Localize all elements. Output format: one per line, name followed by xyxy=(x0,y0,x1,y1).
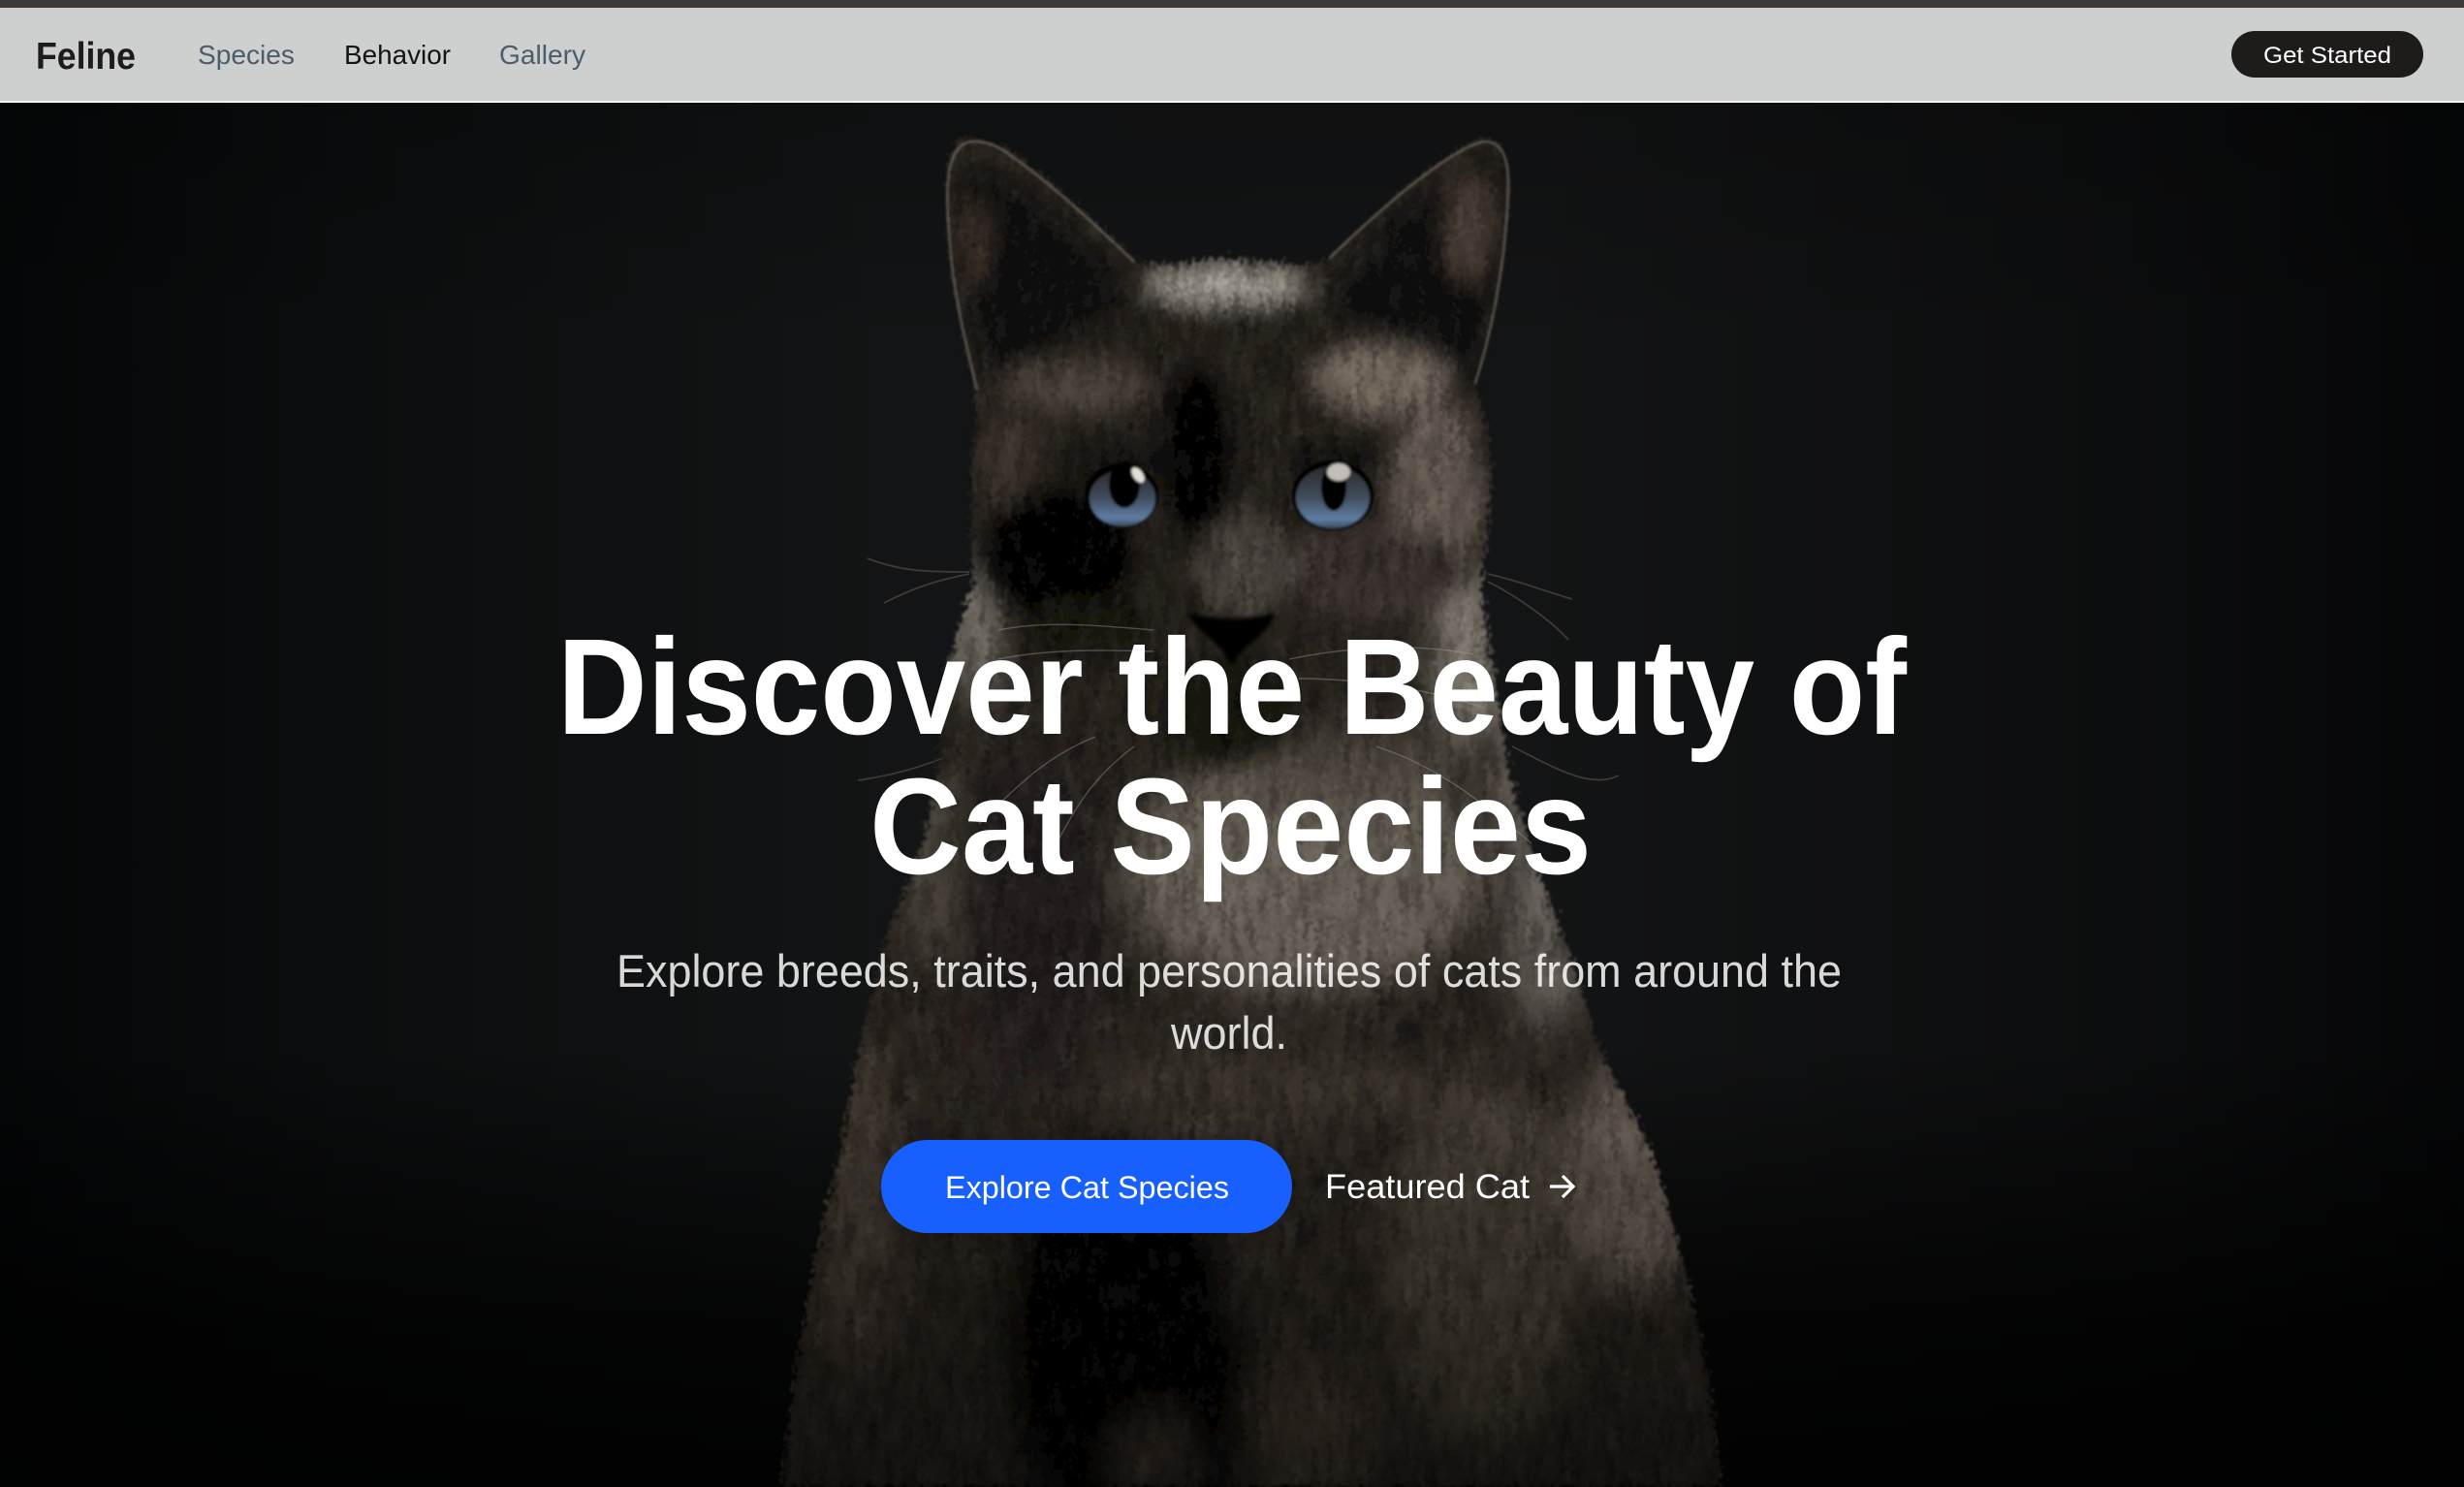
icon: right arrow xyxy=(1550,1176,1573,1197)
ear rim light xyxy=(947,142,1508,390)
get started button: Get Started xyxy=(2263,43,2391,69)
link: Featured Cat: Featured Cat xyxy=(1325,1168,1530,1206)
top window strip xyxy=(0,0,2464,8)
nav link: Gallery: Gallery xyxy=(499,40,585,70)
hero subtitle xyxy=(616,945,1842,1059)
hero subtitle: world. xyxy=(1170,1007,1287,1059)
dark fur texture xyxy=(756,126,1745,1487)
lower whiskers xyxy=(979,624,1532,853)
fur body and head xyxy=(756,126,1745,1487)
right eye xyxy=(1292,460,1374,530)
navigation bar xyxy=(0,8,2464,103)
logo: Feline: Feline xyxy=(36,36,136,78)
cat shadow gradient xyxy=(781,1165,1720,1487)
hero title xyxy=(557,610,1908,902)
nav link: Species: Species xyxy=(198,40,295,70)
head shading xyxy=(963,155,1501,761)
button: Explore Cat Species xyxy=(881,1140,1292,1233)
light fur texture xyxy=(756,126,1745,1487)
left eye xyxy=(1085,461,1158,527)
hero subtitle: Explore breeds, traits, and personalities of cats from around the xyxy=(616,945,1842,997)
nose xyxy=(1188,613,1275,664)
cat illustration xyxy=(756,126,1745,1487)
whiskers behind the head xyxy=(858,558,1619,780)
hero title: Cat Species xyxy=(869,749,1592,902)
nav link: Behavior: Behavior xyxy=(344,40,451,70)
get started button xyxy=(2231,31,2423,78)
button: Explore Cat Species: Explore Cat Species xyxy=(945,1170,1229,1205)
chest and body shading xyxy=(821,557,1708,1487)
hero title: Discover the Beauty of xyxy=(557,610,1908,763)
